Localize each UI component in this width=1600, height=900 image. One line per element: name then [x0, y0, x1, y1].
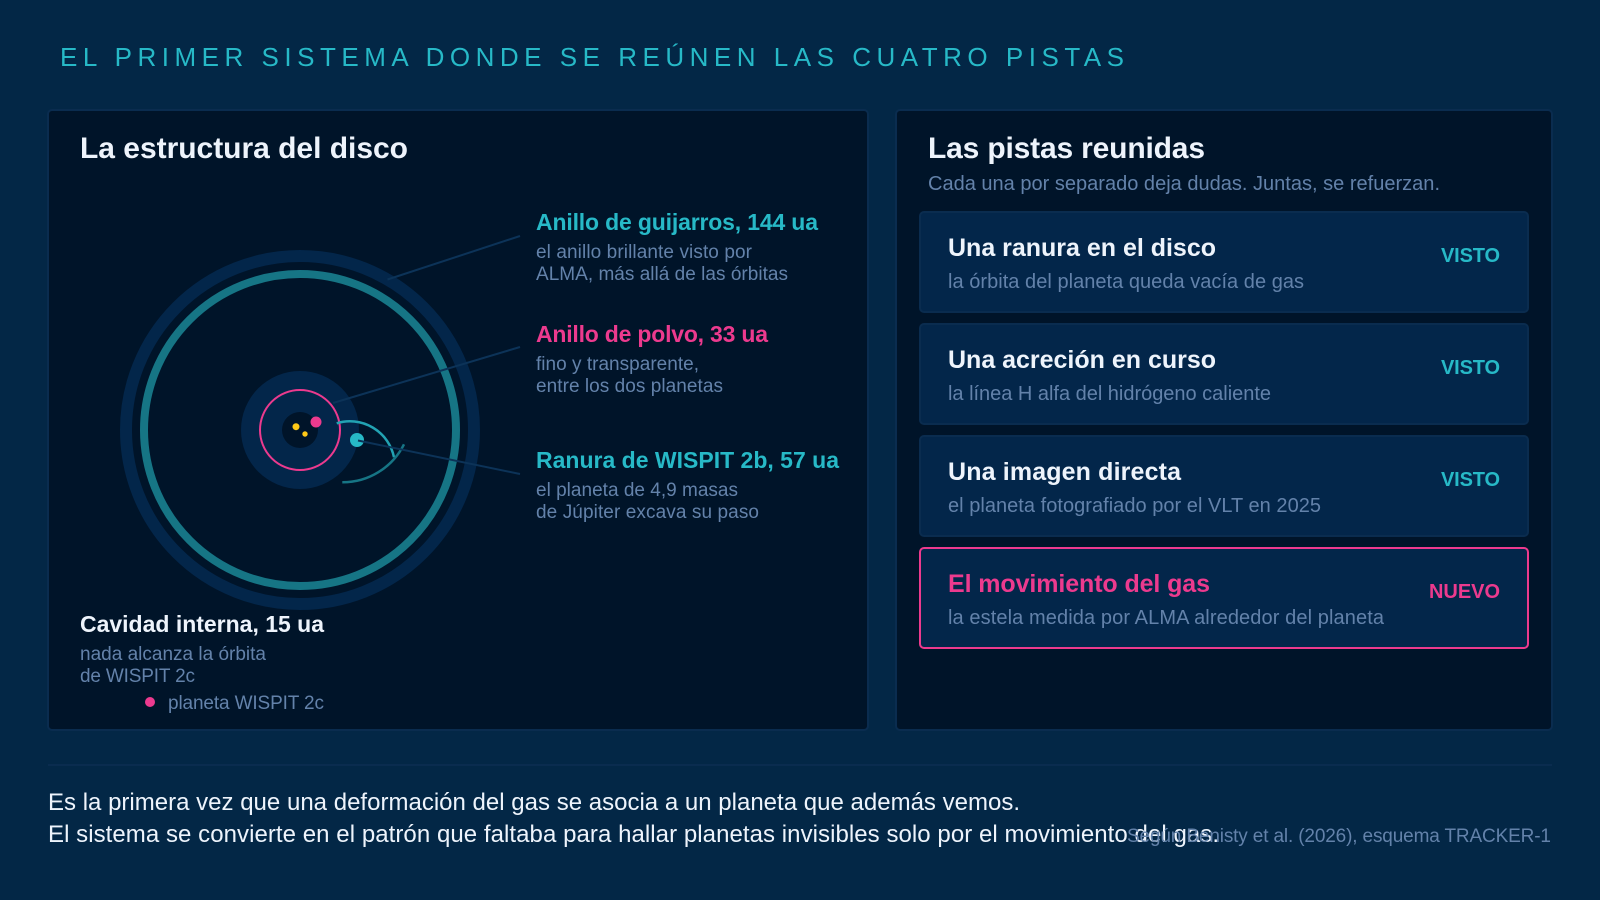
card: direct image: Una imagen directa	[948, 458, 1182, 486]
label: pebble ring: Anillo de guijarros, 144 ua	[536, 209, 818, 235]
card: disc gap: la órbita del planeta queda vacía de gas	[948, 271, 1304, 293]
card: gas motion: NUEVO	[1429, 581, 1500, 603]
panel heading: disc structure: La estructura del disco	[80, 132, 408, 165]
label: WISPIT 2b gap: de Júpiter excava su paso	[536, 502, 759, 523]
label: WISPIT 2b gap	[536, 447, 839, 523]
conclusion text	[48, 789, 1219, 848]
outer pebble halo	[126, 256, 474, 604]
card: disc gap: Una ranura en el disco	[948, 234, 1216, 262]
card: disc gap: VISTO	[1441, 245, 1500, 267]
label: internal cavity: nada alcanza la órbita	[80, 644, 266, 665]
panel: clues	[896, 110, 1552, 730]
leader line: gap	[358, 440, 520, 474]
card: direct image: el planeta fotografiado por el VLT en 2025	[948, 495, 1321, 517]
card: gas motion	[920, 548, 1528, 648]
planet WISPIT 2b	[350, 433, 364, 447]
label: dust ring	[536, 321, 768, 397]
leader line: pebble ring	[388, 236, 520, 280]
title: EL PRIMER SISTEMA DONDE SE REÚNEN LAS CUATRO PISTAS	[60, 42, 1124, 72]
internal cavity	[282, 412, 318, 448]
wake arc near	[337, 421, 394, 457]
label: pebble ring	[536, 209, 818, 285]
label: internal cavity	[80, 611, 324, 687]
wake arc far	[342, 444, 404, 482]
pebble ring	[144, 274, 456, 586]
card: accretion: Una acreción en curso	[948, 346, 1216, 374]
disc diagram	[126, 236, 520, 604]
label: pebble ring: el anillo brillante visto por	[536, 242, 753, 263]
label: dust ring: fino y transparente,	[536, 354, 699, 375]
label: internal cavity: Cavidad interna, 15 ua	[80, 611, 324, 637]
label: pebble ring: ALMA, más allá de las órbitas	[536, 264, 788, 285]
label: WISPIT 2b gap: Ranura de WISPIT 2b, 57 ua	[536, 447, 839, 473]
panel: disc structure	[48, 110, 868, 730]
conclusion text: El sistema se convierte en el patrón que faltaba para hallar planetas invisibles solo por el movimiento del gas.	[48, 821, 1219, 848]
star B	[302, 431, 308, 437]
label: internal cavity: de WISPIT 2c	[80, 666, 195, 687]
label: dust ring: entre los dos planetas	[536, 376, 723, 397]
card: gas motion: El movimiento del gas	[948, 570, 1210, 598]
panel subtitle: Cada una por separado deja dudas. Juntas, se refuerzan.	[928, 173, 1440, 195]
planet WISPIT 2c	[310, 416, 322, 428]
leader line: dust ring	[333, 347, 520, 403]
card: accretion: la línea H alfa del hidrógeno caliente	[948, 383, 1271, 405]
conclusion text: Es la primera vez que una deformación del gas se asocia a un planeta que además vemos.	[48, 789, 1020, 816]
card: accretion	[920, 324, 1528, 424]
star A	[292, 423, 300, 430]
card: accretion: VISTO	[1441, 357, 1500, 379]
card: direct image: VISTO	[1441, 469, 1500, 491]
card: gas motion: la estela medida por ALMA alrededor del planeta	[948, 607, 1385, 629]
card: direct image	[920, 436, 1528, 536]
card: disc gap	[920, 212, 1528, 312]
panel heading: clues: Las pistas reunidas	[928, 132, 1205, 165]
label: dust ring: Anillo de polvo, 33 ua	[536, 321, 768, 347]
source note: Según Benisty et al. (2026), esquema TRACKER-1	[1127, 826, 1551, 847]
inner disc	[241, 371, 359, 489]
legend: planet WISPIT 2c: planeta WISPIT 2c	[168, 693, 324, 714]
label: WISPIT 2b gap: el planeta de 4,9 masas	[536, 480, 738, 501]
dust ring	[260, 390, 340, 470]
